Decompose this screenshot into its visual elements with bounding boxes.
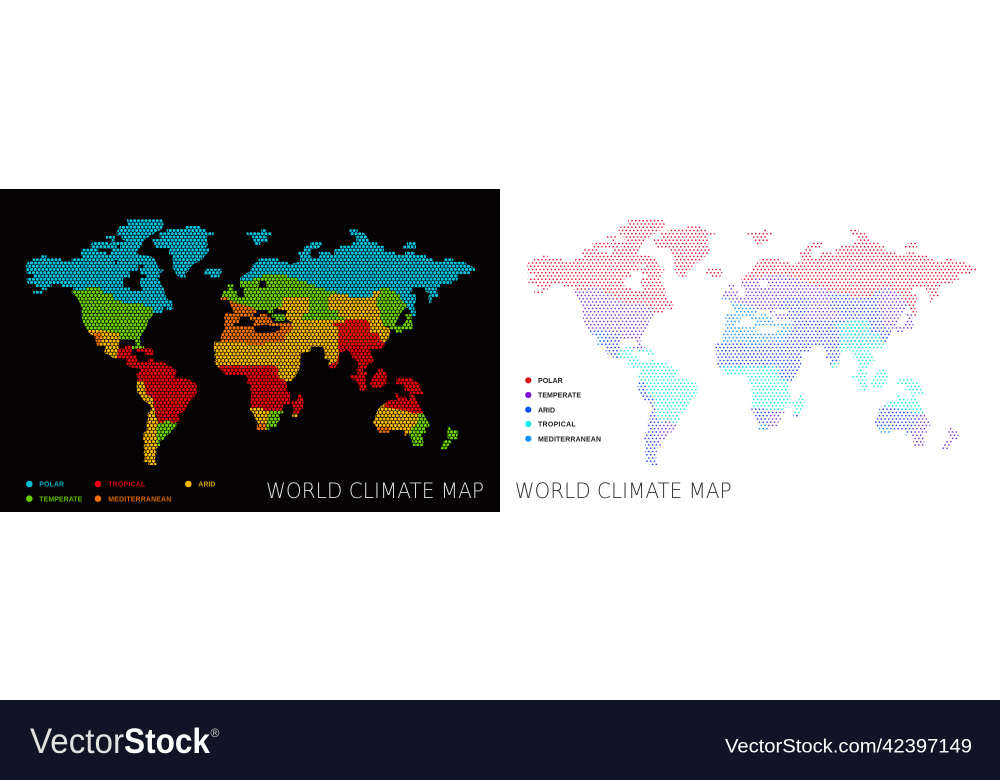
legend: dark panel: TROPICAL [108,482,146,489]
logo: VectorStock: Stock [124,722,210,761]
panel: dark world climate map [0,189,500,512]
dotted map: polar regions [26,219,475,316]
dotted map: temperate regions [72,274,458,449]
legend: light panel: ARID [538,407,555,414]
image id text: VectorStock.com/42397149 [725,737,972,758]
dotted map: temperate regions [573,274,959,449]
legend: dark panel [26,481,215,503]
dotted map: mediterranean regions [93,297,407,436]
legend: light panel: MEDITERRANEAN [538,436,601,443]
legend: light panel [525,377,601,443]
legend: dark panel: TEMPERATE [39,496,83,503]
legend: dark panel: POLAR [39,482,64,489]
logo: VectorStock [30,722,220,761]
title: light panel: WORLD CLIMATE MAP [515,479,732,503]
panel background [0,189,500,512]
dotted map: arid regions [88,291,422,465]
logo: VectorStock: Vector [30,722,124,761]
dotted map: arid regions [589,291,923,465]
legend: dark panel: ARID [198,482,215,489]
panel: light world climate map [515,219,976,503]
dotted map: mediterranean regions [594,297,908,436]
dotted map: tropical regions [618,319,924,423]
legend: light panel: POLAR [538,378,563,385]
legend: light panel: TROPICAL [538,422,576,429]
logo: VectorStock: ® [210,726,220,740]
legend: light panel: TEMPERATE [538,393,581,400]
dotted map: tropical regions [117,319,423,423]
footer band [0,700,1000,780]
dotted map: polar regions [527,219,976,316]
title: dark panel: WORLD CLIMATE MAP [266,479,484,503]
legend: dark panel: MEDITERRANEAN [108,496,171,503]
